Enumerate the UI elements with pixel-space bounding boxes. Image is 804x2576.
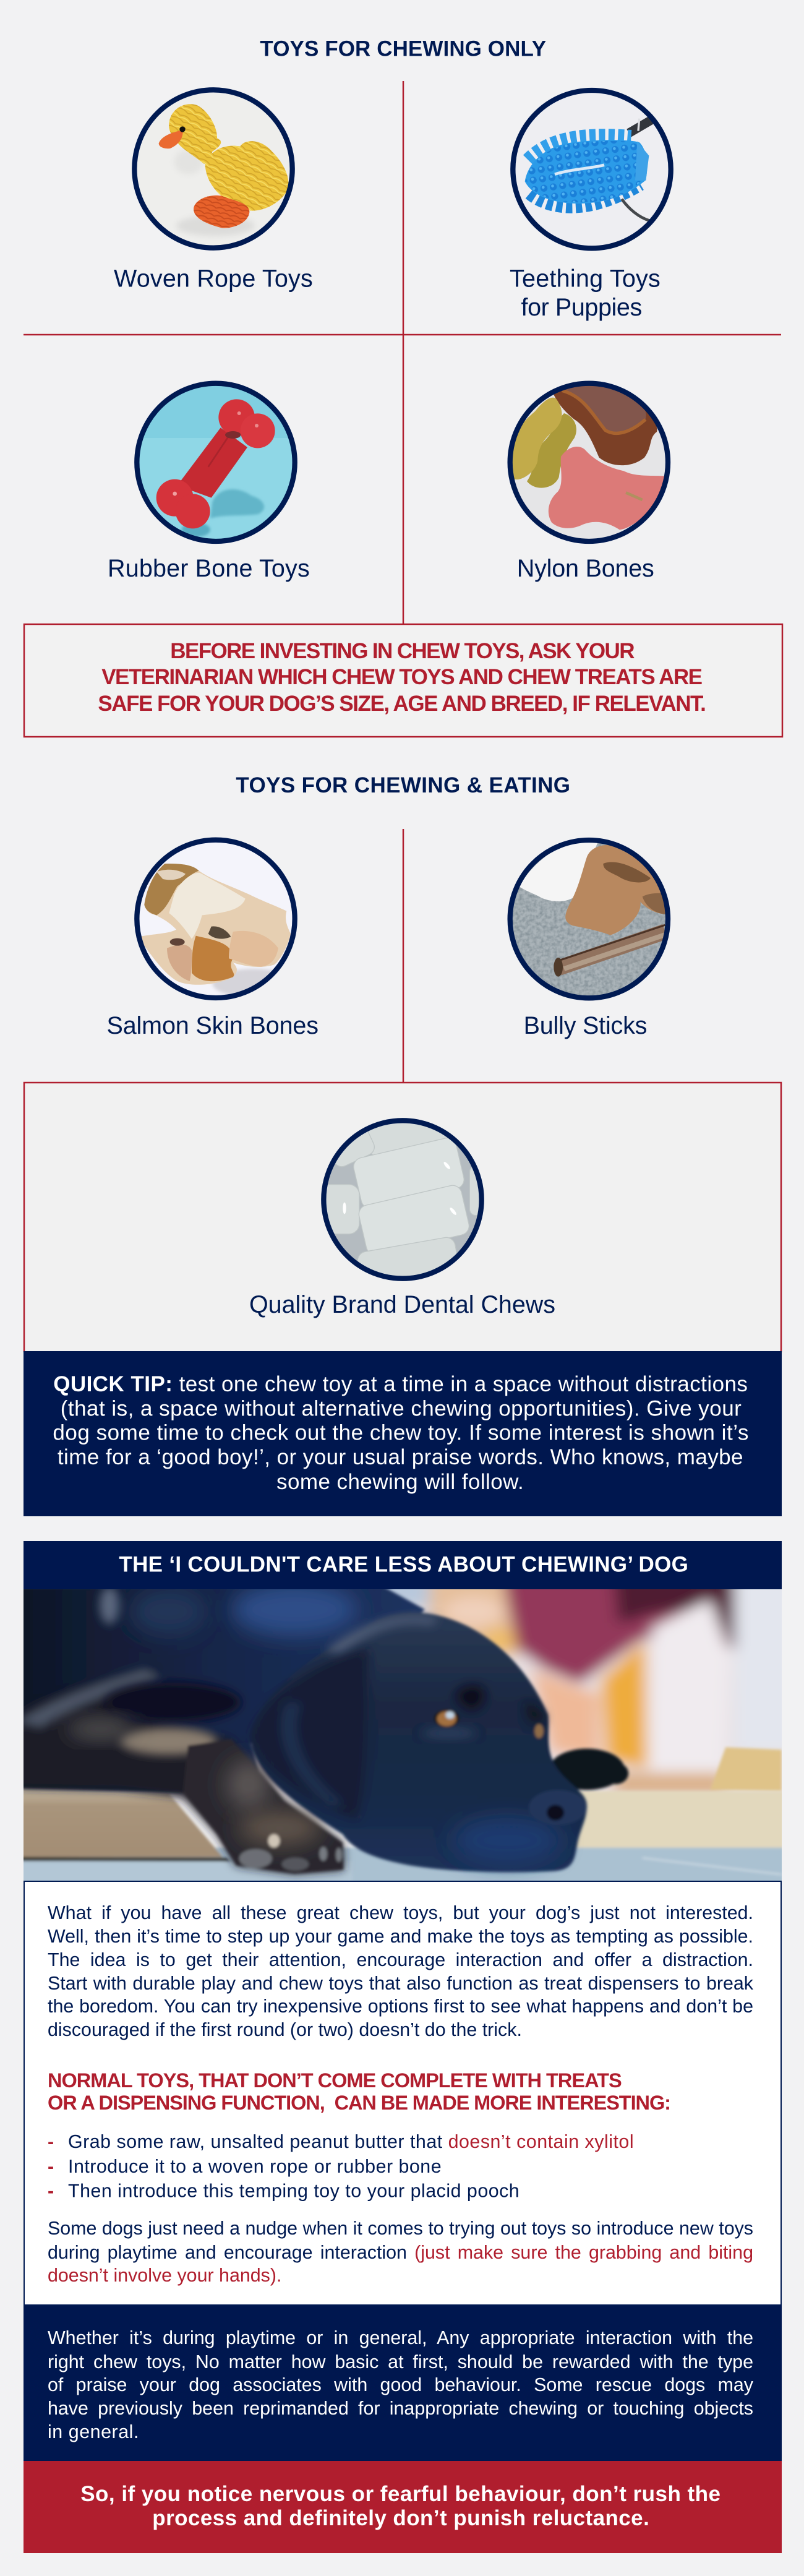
text: normal toys heading and bullet list xyxy=(48,2069,671,2202)
icon: salmon skin bone xyxy=(134,838,297,1001)
panel: quality brand dental chews xyxy=(24,1083,781,1352)
text: quick tip body: some chewing will follow. xyxy=(276,1470,524,1494)
item: woven rope toys xyxy=(114,84,313,293)
callout: ask your veterinarian: SAFE FOR YOUR DOG’S SIZE, AGE AND BREED, IF RELEVANT. xyxy=(98,692,706,716)
icon: blue spiked teether xyxy=(510,88,674,251)
panel: navy rescue dogs note: Whether it’s during playtime or in general, Any appropriate interaction with the xyxy=(48,2327,753,2348)
text block: intro paragraph xyxy=(48,1902,753,2040)
panel: navy rescue dogs note: have previously been reprimanded for inappropriate chewing or touching objects xyxy=(48,2398,753,2419)
label: salmon skin bones: Salmon Skin Bones xyxy=(106,1012,319,1039)
text: normal toys heading and bullet list: - xyxy=(48,2131,54,2152)
platform and floor xyxy=(14,1788,797,1885)
text block: intro paragraph: The idea is to get their attention, encourage interaction and offer a distraction. xyxy=(48,1949,753,1970)
text block: intro paragraph: discouraged if the first round (or two) doesn’t do the trick. xyxy=(48,2019,522,2040)
text: quick tip body: QUICK TIP: test one chew toy at a time in a space without distractions xyxy=(53,1372,748,1396)
icon: red rubber bone xyxy=(134,381,297,544)
text block: nudge paragraph xyxy=(48,2218,753,2286)
text block: intro paragraph: the boredom. You can try inexpensive options first to see what happens and don’t be xyxy=(48,1996,753,2017)
panel: navy rescue dogs note: in general. xyxy=(48,2421,139,2442)
item: rubber bone toys xyxy=(108,376,310,582)
dog xyxy=(19,1582,628,1874)
divider lines xyxy=(24,81,781,625)
label: teething toys for puppies xyxy=(510,265,661,321)
text block: nudge paragraph: during playtime and encourage interaction (just make sure the grabbing and biting xyxy=(48,2242,753,2263)
text: quick tip body xyxy=(53,1372,748,1494)
panel: red closing message xyxy=(24,2461,782,2553)
icon: white dental chews xyxy=(321,1118,484,1281)
text: quick tip body: (that is, a space without alternative chewing opportunities). Give your xyxy=(61,1396,742,1420)
label: teething toys for puppies: Teething Toys xyxy=(510,265,661,293)
divider line xyxy=(403,829,404,1083)
heading: toys for chewing only: TOYS FOR CHEWING ONLY xyxy=(260,37,546,61)
text block: nudge paragraph: Some dogs just need a nudge when it comes to trying out toys so introduce new toys xyxy=(48,2218,753,2239)
item: nylon bones xyxy=(502,376,675,582)
text: normal toys heading and bullet list: NORMAL TOYS, THAT DON’T COME COMPLETE WITH TREATS xyxy=(48,2069,622,2092)
text: normal toys heading and bullet list: Grab some raw, unsalted peanut butter that doesn’t contain xylitol xyxy=(68,2131,634,2152)
panel: navy rescue dogs note: of praise your dog associates with good behaviour. Some rescue dogs may xyxy=(48,2374,753,2395)
icon: rope duck toy xyxy=(132,87,295,251)
label: nylon bones: Nylon Bones xyxy=(517,555,654,582)
callout: ask your veterinarian: VETERINARIAN WHICH CHEW TOYS AND CHEW TREATS ARE xyxy=(101,665,703,689)
text: quick tip body: time for a ‘good boy!’, or your usual praise words. Who knows, maybe xyxy=(58,1445,743,1469)
text: normal toys heading and bullet list: - xyxy=(48,2181,54,2202)
item: teething toys xyxy=(505,84,678,321)
label: bully sticks: Bully Sticks xyxy=(524,1012,647,1039)
blurred background xyxy=(0,1574,804,1801)
text: normal toys heading and bullet list: Then introduce this temping toy to your placid pooch xyxy=(68,2181,520,2202)
item: bully sticks xyxy=(502,833,675,1039)
text block: nudge paragraph: doesn’t involve your hands). xyxy=(48,2265,281,2286)
low box at right xyxy=(710,1747,782,1792)
icon: bully stick on carpet xyxy=(507,838,670,1001)
banner: the dog that does not care about chewing xyxy=(24,1541,782,1589)
label: woven rope toys: Woven Rope Toys xyxy=(114,265,313,293)
panel: navy rescue dogs note: right chew toys, No matter how basic at first, should be rewarded with the type xyxy=(48,2351,753,2372)
icon: assorted biscuit bones xyxy=(507,381,670,544)
section: toys for chewing and eating xyxy=(24,773,782,1352)
panel: white text panel xyxy=(24,1881,782,2306)
text: quick tip body: dog some time to check out the chew toy. If some interest is shown it’s xyxy=(53,1421,748,1445)
text: normal toys heading and bullet list: OR A DISPENSING FUNCTION, CAN BE MADE MORE INTERESTING: xyxy=(48,2092,671,2114)
panel: red closing message: So, if you notice nervous or fearful behaviour, don’t rush the xyxy=(80,2482,721,2506)
panel: quick tip xyxy=(24,1351,782,1516)
banner: the dog that does not care about chewing: THE ‘I COULDN'T CARE LESS ABOUT CHEWING’ DOG xyxy=(119,1552,688,1576)
text: normal toys heading and bullet list: - xyxy=(48,2156,54,2177)
callout: ask your veterinarian: BEFORE INVESTING IN CHEW TOYS, ASK YOUR xyxy=(170,639,635,663)
item: salmon skin bones xyxy=(106,833,319,1039)
label: rubber bone toys: Rubber Bone Toys xyxy=(108,555,310,582)
label: teething toys for puppies: for Puppies xyxy=(521,294,642,321)
heading: toys for chewing and eating: TOYS FOR CHEWING & EATING xyxy=(236,773,570,797)
panel: red closing message: process and definitely don’t punish reluctance. xyxy=(152,2506,649,2530)
panel: navy rescue dogs note xyxy=(24,2306,782,2461)
text block: intro paragraph: Start with durable play and chew toys that also function as treat dispensers to break xyxy=(48,1973,753,1994)
callout: ask your veterinarian xyxy=(24,624,782,737)
text: normal toys heading and bullet list: Introduce it to a woven rope or rubber bone xyxy=(68,2156,442,2177)
photo: black labrador resting its head on the floor xyxy=(24,1589,782,1881)
section: toys for chewing only xyxy=(24,37,783,737)
text block: intro paragraph: What if you have all these great chew toys, but your dog’s just not interested. xyxy=(48,1902,753,1923)
text block: intro paragraph: Well, then it’s time to step up your game and make the toys as tempting as possible. xyxy=(48,1926,753,1947)
label: quality brand dental chews: Quality Brand Dental Chews xyxy=(249,1291,555,1318)
